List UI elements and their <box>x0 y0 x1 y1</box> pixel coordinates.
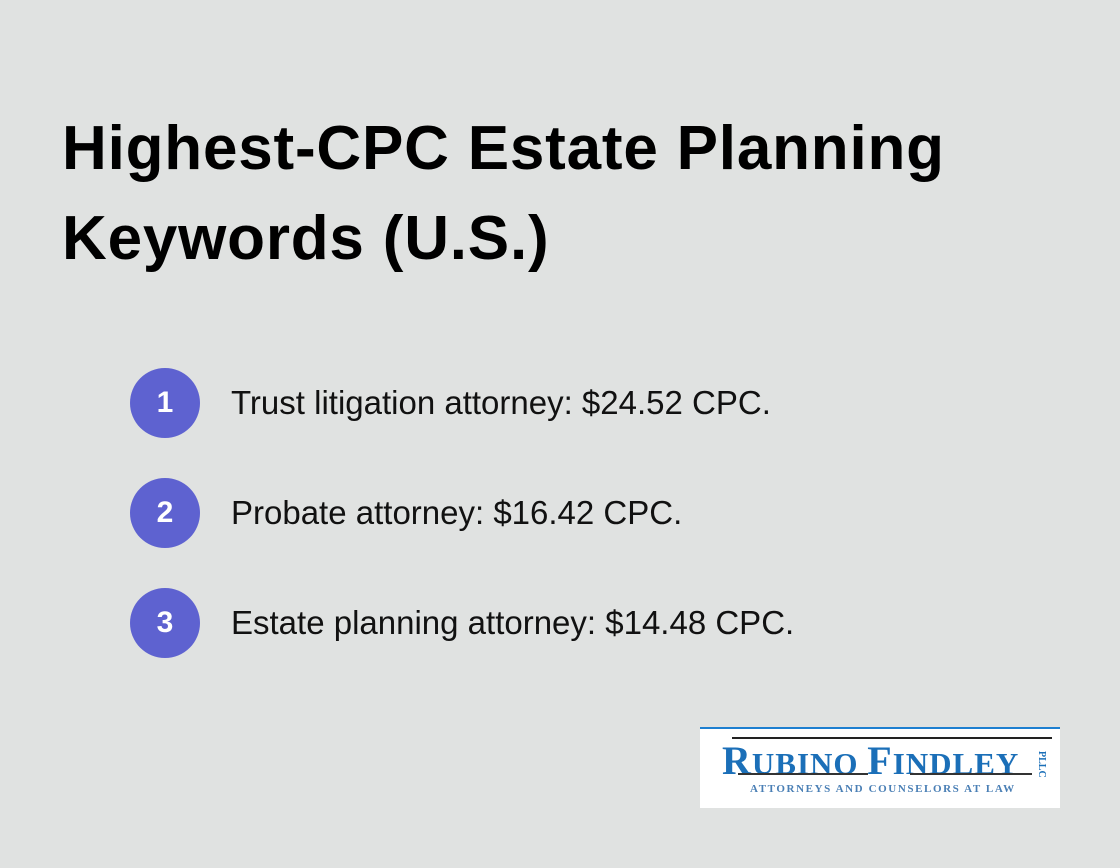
item 2 <box>130 478 682 548</box>
item 1 <box>130 368 771 438</box>
logo <box>700 727 1060 808</box>
logo: ATTORNEYS AND COUNSELORS AT LAW <box>750 783 1016 795</box>
item 2: Probate attorney: $16.42 CPC. <box>231 494 682 531</box>
title <box>62 114 945 273</box>
title: Highest-CPC Estate Planning <box>62 114 945 183</box>
item 3: Estate planning attorney: $14.48 CPC. <box>231 604 794 641</box>
item 2: 2 <box>157 496 173 529</box>
item 1: Trust litigation attorney: $24.52 CPC. <box>231 384 771 421</box>
logo: PLLC <box>1036 751 1047 778</box>
item 3: 3 <box>157 606 173 639</box>
item 1: 1 <box>157 386 173 419</box>
logo: RUBINO FINDLEY <box>722 738 1019 783</box>
title: Keywords (U.S.) <box>62 204 549 273</box>
item 3 <box>130 588 794 658</box>
